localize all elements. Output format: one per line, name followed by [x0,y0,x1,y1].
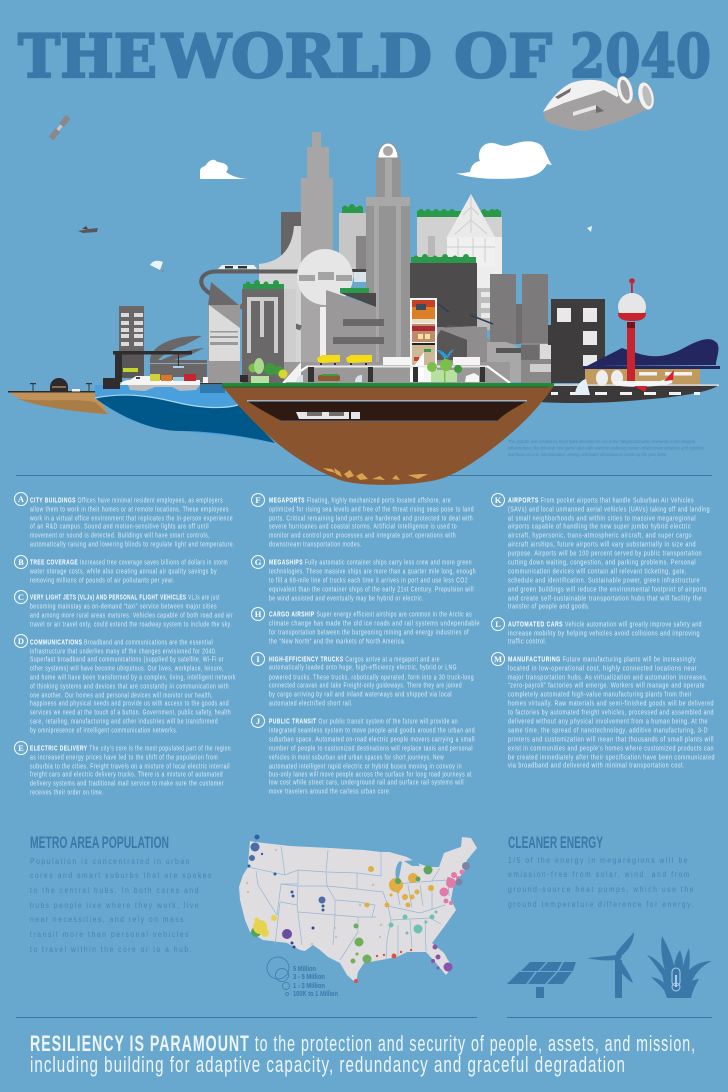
street level base [284,362,510,383]
item B tree coverage: B [18,557,24,567]
item D communications: services we need at the touch of a button. Government, public safety, health [30,709,231,716]
heading: METRO AREA POPULATION [30,834,169,852]
wedge building [208,282,240,383]
item A city buildings: of an R&D campus. Sound and motion-sensitive lights are off until [30,523,209,530]
body text: transit more than personal vehicles [30,929,190,939]
item K airports: K [495,495,502,505]
item F megaports: F [255,495,261,505]
item D communications: one another. Our homes and personal devices will monitor our health, [30,692,213,699]
item J public transit: number of people to customized destinations will replace taxis and personal [269,745,473,752]
tower shaft and sphere [618,293,646,382]
map land [239,837,477,983]
item F megaports [252,494,474,548]
body text: cores and smart suburbs that are spokes [30,870,213,880]
item I high-efficiency trucks: I [256,654,260,664]
title: WORLD [161,22,432,92]
egg pods [596,370,623,386]
item H cargo airship: CARGO AIRSHIP Super energy efficient airships are common in the Arctic as [269,611,472,618]
item I high-efficiency trucks: HIGH-EFFICIENCY TRUCKS Cargos arrive at a megaport and are [269,656,440,663]
item E electric delivery [14,742,231,796]
item J public transit: move travelers around the carless urban core. [269,788,391,795]
item A city buildings: work in a virtual office environment that replicates the in-person experience [29,515,233,522]
port truck [200,377,224,384]
blue pod vehicle [575,379,590,395]
automated yellow trucks [317,355,372,365]
item D communications: infrastructure that underlies many of the changes envisioned for 2040. [30,648,217,655]
state lines [248,846,449,960]
east metro circles [376,862,470,972]
item B tree coverage: TREE COVERAGE Increased tree coverage saves billions of dollars in storm [30,559,228,566]
illustration: city skyline [201,132,605,383]
credit note: This graphic was created by Ryan Mark Merchée for use in the “Megacommunity Scenarios in the Imagine [508,439,695,445]
credit note: that focus on U.S. transportation, energy, and water infrastructure needs by the year 2040. [508,452,667,458]
item F megaports: optimized for rising sea levels and free of the threat rising seas pose to land [269,506,474,513]
body text: to the central hubs. In both cores and [30,885,200,895]
roots and leaves at base [323,468,428,480]
terminal building [585,369,700,385]
chart: US metro population map [239,834,477,998]
item L automated cars: traffic control. [508,638,547,645]
diagonal solar wings [438,304,493,324]
credit note [508,439,704,458]
sand pier [8,378,108,414]
icon: personal flight vehicle small [150,261,164,272]
item D communications: Superfast broadband and communications (supplied by satellite, Wi-Fi or [30,656,224,663]
item L automated cars: L [495,619,501,629]
item D communications: care, retailing, manufacturing and other industries will be transformed [30,718,218,725]
back right building with glass pyramid [417,194,502,330]
item D communications: of thinking systems and devices that are constantly in communication with [30,683,229,690]
tall tower [301,132,333,373]
map legend: 100K to 1 Million [293,991,338,998]
item F megaports: severe hurricanes and coastal storms. Artificial Intelligence is used to [269,523,457,530]
title: OF [454,22,552,92]
plaza trees left [240,358,301,383]
underground train [296,412,360,419]
title: THE [18,22,157,92]
illustration: airport [539,278,720,403]
item D communications: D [18,636,24,646]
heading: CLEANER ENERGY [508,834,603,852]
wooden tram [318,374,340,381]
item I high-efficiency trucks: powered trucks. These trucks, robotically operated, form into a 30 truck-long [269,674,474,681]
item J public transit: bus-only lanes will move people across the surface for long road journeys at [269,771,472,778]
item F megaports: downstream transportation modes. [269,541,362,548]
icon: vehicle far right [587,226,592,232]
great lakes [396,860,420,884]
item G megaships: equivalent than the container ships of the early 21st Century. Propulsion will [269,586,474,593]
item A city buildings: CITY BUILDINGS Offices have minimal resident employees, as employers [30,497,223,504]
plaza trees right with blue bird [427,349,479,382]
monorail with train [201,265,366,328]
item D communications: happiness and physical needs and provide us with access to the goods and [30,700,229,707]
item M manufacturing: M [494,654,502,664]
item G megaships: technologies. These massive ships are more than a quarter mile long, enough [269,568,476,575]
body text: to travel within the core or to a hub. [30,944,193,954]
item A city buildings: automatically raising and lowering blinds to regulate light and temperature. [30,541,235,548]
red control tower antenna [629,278,635,294]
column 1 text [14,492,236,796]
map legend: 5 Million [293,966,316,973]
item A city buildings: movement or sound is detected. Buildings will have smart controls, [30,532,210,539]
item C very light jets: travel or air travel only, could extend the roadway system to include the sky. [30,621,232,628]
item J public transit [252,714,475,795]
item F megaports: monitor and control port processes and integrate port operations with [269,532,456,539]
megaship [120,374,200,391]
map legend: 3 - 5 Million [293,974,325,981]
item I high-efficiency trucks: automated electrified short rail. [269,700,353,707]
item H cargo airship: H [255,609,262,619]
item E electric delivery: ELECTRIC DELIVERY The city’s core is the most populated part of the region [30,745,231,752]
item J public transit: integrated seamless system to move people and goods around the urban and [269,727,475,734]
item B tree coverage: removing millions of pounds of air pollutants per year. [30,577,175,584]
back building with roof trees [339,204,367,278]
item L automated cars [492,618,702,645]
horizontal rule under illustration [16,475,712,476]
item H cargo airship [252,608,480,645]
item K airports: transfer of people and goods. [508,603,590,610]
icon: jet left [78,226,98,233]
body text: hubs people live where they work, live [30,900,200,910]
item D communications: other systems) will have become ubiquitous. Our lives, workplace, leisure, [30,665,224,672]
item J public transit: PUBLIC TRANSIT Our public transit system of the future will provide an [269,718,458,725]
item G megaships [252,556,476,602]
body text: Population is concentrated in urban [30,856,191,866]
building with frame and roof trees [242,280,296,383]
item I high-efficiency trucks: automatically loaded onto huge, high-efficiency electric, hybrid or LNG [269,664,457,671]
item J public transit: vehicles in most suburban and urban spaces for short journeys. New [269,754,444,761]
underground tunnel [247,400,527,422]
illustration: port and left shore [8,306,275,443]
icon: cloud small [200,160,247,179]
item H cargo airship: the “New North” and the markets of North America. [269,638,406,645]
item J public transit: suburban space. Automated on-road electric people movers carrying a small [269,736,475,743]
item J public transit: J [256,716,261,726]
dividers [16,1017,477,1018]
item E electric delivery: E [18,743,24,753]
port crane [103,351,192,389]
dark block with windows [548,299,605,383]
elevated roadway [283,357,510,383]
grass surface [222,383,554,386]
icon: satellite [49,115,71,141]
item G megaships: be wind assisted and eventually may be hybrid or electric. [269,595,424,602]
map legend: 1 - 3 Million [293,983,325,990]
central metro circles [350,866,434,983]
port sail terminal [150,336,207,382]
item A city buildings: allow them to work in their homes or at remote locations. These employees [30,506,229,513]
item B tree coverage: water storage costs, while also creating annual air quality savings by [29,568,217,575]
twin dome tower [366,143,410,366]
item F megaports: MEGAPORTS Floating, highly mechanized ports located offshore, are [269,497,451,504]
body text [30,856,213,954]
item E electric delivery: freight cars and electric delivery trucks. There is a mixture of automated [30,771,223,778]
item I high-efficiency trucks: by cargo arriving by rail and inland waterways and shipped via local [269,691,452,698]
sphere building [297,249,353,305]
column 3 text [492,494,715,769]
item E electric delivery: delivery systems and traditional mail service to make sure the customer [30,780,224,787]
water [95,385,275,443]
item E electric delivery: suburbia to the cities. Freight travels on a mixture of local electric interrail [30,763,230,770]
dark tower behind [281,212,301,322]
west metro circles [246,834,382,948]
item B tree coverage [14,556,228,584]
small personal vehicles [296,375,362,382]
panel: cleaner energy text [508,834,695,909]
item K airports [492,494,710,610]
item G megaships: to fill a 68-mile line of trucks each time it arrives in port and use less CO2 [269,577,468,584]
right grey towers and arch [436,274,563,383]
item C very light jets: VERY LIGHT JETS (VLJs) AND PERSONAL FLIGHT VEHICLES VLJs are just [30,594,220,601]
terminal roof [583,339,718,368]
item M manufacturing [492,652,715,769]
item J public transit: low cost while street cars, underground rail and surface rail systems will [269,779,464,786]
icon: wind turbine [587,932,634,998]
item D communications: and home will have been transformed by a complex, living, intelligent network [30,674,236,681]
item C very light jets: becoming mainstay as on-demand “taxi” service between major cities [30,603,217,610]
item I high-efficiency trucks [252,652,474,707]
closing statement [30,1031,696,1077]
item E electric delivery: receives their order on time. [30,789,104,796]
item E electric delivery: as increased energy prices have led to the shift of the population from [30,754,218,761]
sail building [259,226,301,375]
title [18,22,711,92]
item F megaports: ports. Critical remaining land ports are hardened and protected to deal with [269,515,473,522]
panel: metro area population text [30,834,213,954]
column 2 text [252,494,480,795]
icon: solar panel [507,962,576,998]
item C very light jets [14,590,233,628]
item D communications: COMMUNICATIONS Broadband and communications are the essential [30,639,213,646]
dark building with roof trees [410,254,477,329]
item A city buildings [14,492,235,548]
map legend [267,957,338,998]
illustration: ground cross-section [222,383,554,485]
item H cargo airship: for transportation between the burgeoning mining and energy industries of [269,629,469,636]
item D communications: by omnipresence of intelligent communication networks. [30,727,178,734]
runway [539,384,719,403]
low angled building [320,288,384,375]
item G megaships: MEGASHIPS Fully automatic container ships carry less crew and more green [269,559,472,566]
item D communications [14,634,236,734]
item I high-efficiency trucks: connected caravan and take Freight-only guideways. There they are joined [269,682,462,689]
item A city buildings: A [18,494,25,504]
colourful mixed-use panel [410,298,437,382]
item G megaships: G [255,557,262,567]
item C very light jets: C [18,592,24,602]
icon: cloud large [456,141,552,179]
body text: near necessities, and rely on mass [30,914,185,924]
airliner [613,370,674,392]
body text [508,855,695,909]
icon: geothermal grass with thermometer [647,936,712,998]
item C very light jets: and among more rural areas matures. Vehicles capable of both road and air [30,612,233,619]
item H cargo airship: climate change has made the old ice roads and rail systems undependable [269,620,480,627]
icon: flying aircraft [543,75,657,131]
port tower [119,306,144,378]
item J public transit: automated intelligent rapid electric or hybrid buses moving in convoy in [269,763,462,770]
